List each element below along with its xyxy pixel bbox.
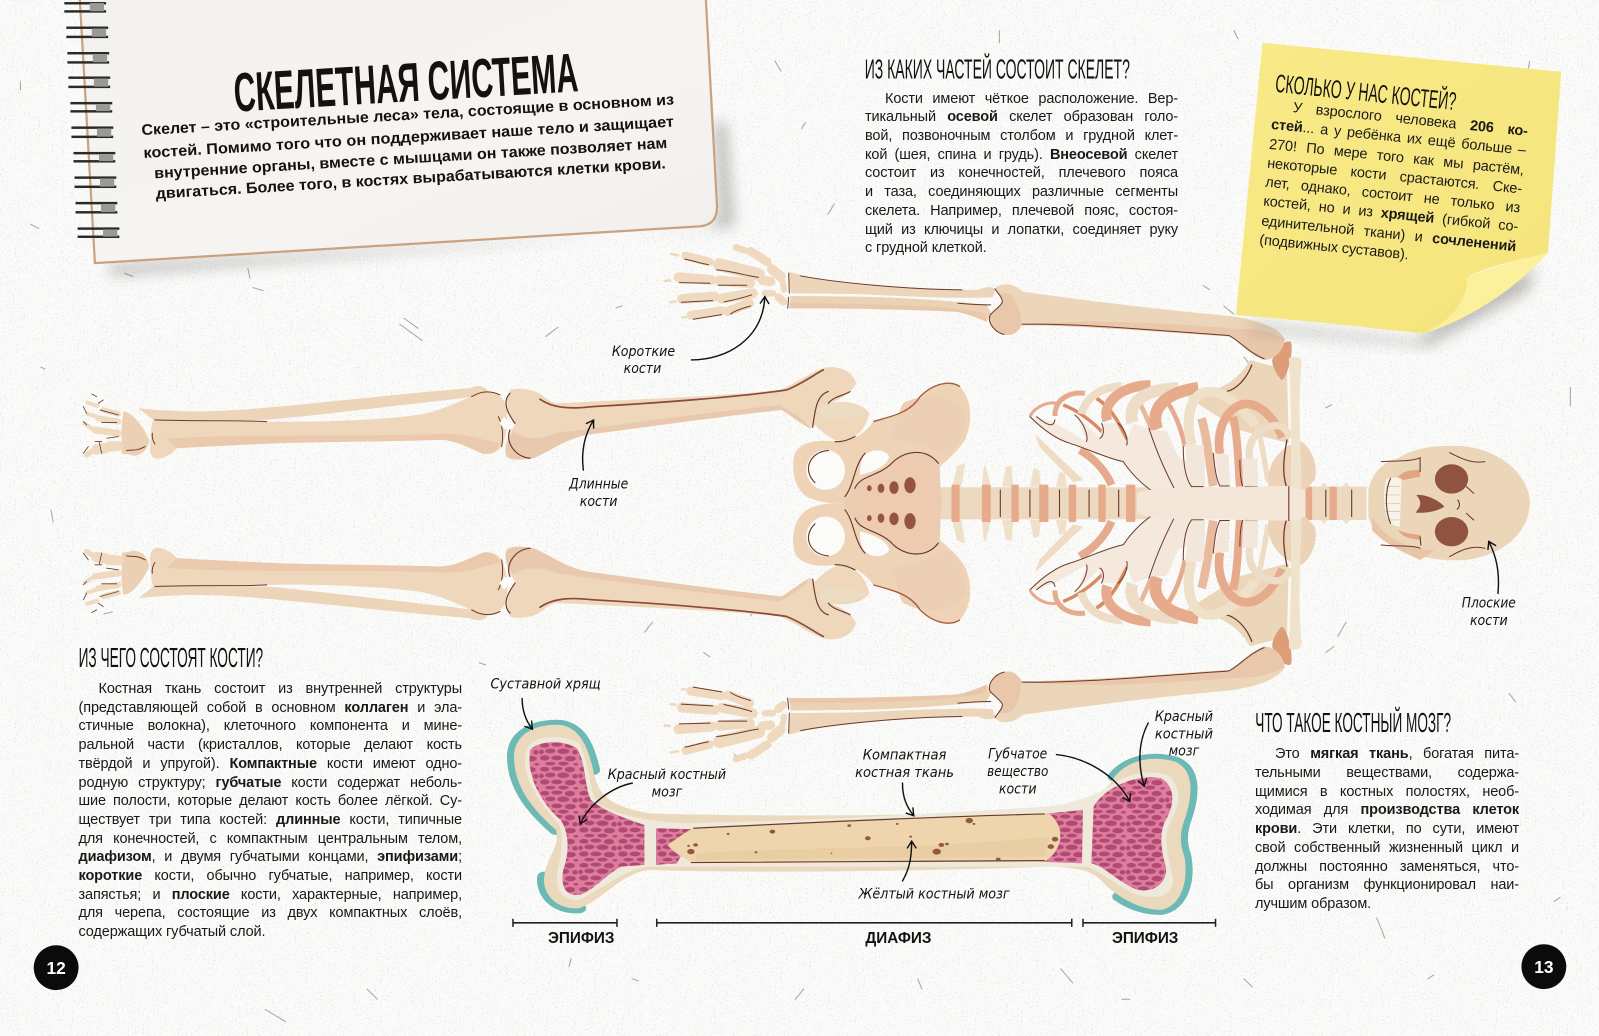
text block: what bones are made of: для конечностей, с компактным центральным телом,	[78, 831, 462, 847]
text block: what bones are made of: запястья; и плоские кости, характерные, например,	[78, 887, 462, 903]
title: СКЕЛЕТНАЯ СИСТЕМА	[232, 41, 580, 124]
heading: parts of skeleton: ИЗ КАКИХ ЧАСТЕЙ СОСТОИТ СКЕЛЕТ?	[865, 54, 1130, 85]
intro text: костей. Помимо того что он поддерживает наше тело и защищает	[143, 113, 675, 162]
intro text: Скелет – это «строительные леса» тела, состоящие в основном из	[141, 91, 675, 139]
spine	[932, 463, 1366, 543]
text block: bone marrow: щимися в костных полостях, необ-	[1255, 784, 1519, 800]
text block: what bones are made of	[78, 681, 462, 940]
label: short bones: Короткие	[612, 344, 675, 360]
sticky heading: СКОЛЬКО У НАС КОСТЕЙ?	[1274, 68, 1458, 116]
text block: parts of skeleton: и таза, соединяющих различные сегменты	[865, 184, 1178, 200]
text block: what bones are made of: ральной части (кристаллов, которые делают кость	[78, 737, 462, 753]
page number 12	[34, 945, 79, 990]
arrow: yellow marrow	[902, 841, 912, 881]
skull	[1368, 446, 1530, 560]
upper leg (top)	[83, 367, 869, 460]
label: compact tissue	[855, 748, 954, 781]
label: flat bones: кости	[1470, 613, 1508, 629]
arrow: short bones	[691, 297, 765, 360]
text block: bone marrow: Это мягкая ткань, богатая пита-	[1275, 746, 1519, 762]
bracket: epiphysis left: ЭПИФИЗ	[548, 930, 615, 947]
red bone marrow	[529, 742, 1172, 895]
label: spongy bone	[987, 747, 1049, 797]
page number 13: 13	[1534, 957, 1554, 977]
bone diagram	[514, 725, 1191, 910]
text block: bone marrow: свой собственный жизненный цикл и	[1255, 840, 1519, 856]
page number 12: 12	[47, 958, 66, 978]
panel: notebook page	[64, 0, 717, 263]
arrow: compact tissue	[902, 783, 914, 816]
intro text: двигаться. Более того, в костях вырабатываются клетки крови.	[155, 155, 666, 203]
text block: what bones are made of: шие полости, которые делают кость более лёгкой. Су-	[78, 793, 462, 809]
text block: parts of skeleton: с грудной клеткой.	[865, 240, 987, 256]
text block: parts of skeleton: тикальный осевой скелет образован голо-	[865, 109, 1178, 125]
shadow: sticky note	[1246, 267, 1535, 347]
label: flat bones	[1462, 596, 1516, 629]
label: spongy bone: кости	[999, 781, 1037, 797]
text block: parts of skeleton: Кости имеют чёткое расположение. Вер-	[885, 91, 1178, 107]
text block: what bones are made of: диафизом, и двумя губчатыми концами, эпифизами;	[78, 849, 462, 865]
arrow: articular cartilage	[522, 698, 532, 729]
text block: what bones are made of: ществует три типа костей: длинные кости, типичные	[78, 812, 462, 828]
shadow: notebook	[107, 122, 734, 275]
text block: sticky note: 270! По мере того как мы растём,	[1268, 136, 1524, 178]
label: long bones	[568, 476, 628, 510]
text block: what bones are made of: (представляющей собой в основном коллаген и эла-	[78, 700, 462, 716]
bracket: diaphysis: ДИАФИЗ	[865, 930, 931, 947]
text block: what bones are made of: короткие кости, обычно губчатые, например, кости	[78, 868, 462, 884]
page number 13	[1521, 944, 1566, 989]
arrow: flat bones	[1489, 541, 1499, 593]
inner pale layer	[525, 737, 1178, 900]
arrow: spongy bone	[1056, 755, 1130, 801]
text block: sticky note: лет, однако, состоит не только из	[1264, 174, 1520, 216]
label: red marrow right	[1155, 709, 1213, 760]
text block: bone marrow: лучшим образом.	[1255, 896, 1371, 912]
label: long bones: Длинные	[568, 476, 628, 492]
text block: parts of skeleton: вой, позвоночным столбом и грудной клет-	[865, 128, 1178, 144]
sternum	[1137, 486, 1305, 521]
bracket: diaphysis	[657, 919, 1072, 947]
text block: sticky note: (подвижных суставов).	[1258, 232, 1409, 263]
label: red marrow right: мозг	[1169, 744, 1200, 760]
text block: bone marrow: должны постоянно заменяться, что-	[1255, 859, 1519, 875]
text block: bone marrow: ходимая для производства клеток	[1255, 802, 1519, 818]
arrow: red marrow left	[580, 783, 632, 824]
label: red marrow left: Красный костный	[608, 767, 726, 783]
text block: sticky note: костей, но и из хрящей (гибкой со-	[1262, 193, 1518, 235]
label: red marrow right: Красный	[1155, 709, 1213, 725]
label: short bones	[612, 344, 675, 377]
skeleton illustration	[83, 247, 1530, 759]
text block: sticky note: стей... а у ребёнка их ещё больше –	[1270, 117, 1526, 158]
text block: what bones are made of: родную структуру; губчатые кости содержат неболь-	[78, 775, 462, 791]
lower arm and hand (bottom)	[665, 646, 1285, 759]
text: ИЗ ЧЕГО СОСТОЯТ КОСТИ?	[79, 642, 263, 673]
bracket: epiphysis right	[1083, 919, 1216, 947]
text block: sticky note: некоторые кости срастаются. Ске-	[1266, 155, 1522, 197]
pelvis	[793, 383, 970, 624]
spiral binding	[64, 2, 119, 238]
bone outer compact layer	[514, 725, 1191, 910]
text block: parts of skeleton: кой (шея, спина и грудь). Внеосевой скелет	[865, 147, 1178, 163]
bracket: epiphysis left	[513, 919, 617, 947]
text block: what bones are made of: содержащих губчатый слой.	[78, 924, 265, 940]
text block: bone marrow: бы организм функционировал наи-	[1255, 877, 1519, 893]
rib cage	[1030, 341, 1316, 665]
text block: bone marrow: крови. Эти клетки, по сути, имеют	[1255, 821, 1519, 837]
label: short bones: кости	[624, 361, 661, 377]
text block: sticky note	[1258, 100, 1528, 263]
label: red marrow right: костный	[1155, 726, 1213, 742]
text block: what bones are made of: Костная ткань состоит из внутренней структуры	[98, 681, 462, 697]
text block: parts of skeleton: скелета. Например, плечевой пояс, состоя-	[865, 203, 1178, 219]
text block: what bones are made of: твёрдой и упругой). Компактные кости имеют одно-	[78, 756, 462, 772]
text block: parts of skeleton	[865, 91, 1178, 256]
intro text	[141, 91, 675, 203]
articular cartilage	[514, 725, 1191, 910]
text block: what bones are made of: для черепа, состоящие из двух компактных слоёв,	[78, 905, 462, 921]
label: compact tissue: костная ткань	[855, 765, 954, 781]
text block: parts of skeleton: состоит из конечностей, плечевого пояса	[865, 165, 1178, 181]
label: flat bones: Плоские	[1462, 596, 1516, 612]
text block: sticky note: У взрослого человека 206 ко-	[1292, 100, 1528, 139]
label: compact tissue: Компактная	[863, 748, 947, 764]
upper arm and hand (top)	[665, 247, 1285, 360]
label: yellow marrow: Жёлтый костный мозг	[858, 886, 1010, 902]
label: spongy bone: Губчатое	[988, 747, 1047, 763]
text block: what bones are made of: стичные волокна), клеточного компонента и мине-	[78, 718, 462, 734]
yellow bone marrow	[668, 814, 1060, 863]
label: long bones: кости	[580, 494, 617, 510]
text block: parts of skeleton: щий из ключицы и лопатки, соединяет руку	[865, 222, 1178, 238]
panel: sticky note	[1236, 43, 1561, 333]
arrow: red marrow right	[1140, 723, 1148, 786]
text block: bone marrow: тельными веществами, содержа-	[1255, 765, 1519, 781]
label: red marrow left: мозг	[652, 784, 683, 800]
arrow: long bones	[583, 420, 594, 470]
bracket: epiphysis right: ЭПИФИЗ	[1112, 930, 1178, 947]
label: spongy bone: вещество	[987, 764, 1049, 780]
text block: bone marrow	[1255, 746, 1520, 912]
lower leg (bottom)	[83, 547, 869, 639]
label: red marrow left	[608, 767, 726, 800]
intro text: внутренние органы, вместе с мышцами он также позволяет нам	[154, 135, 668, 182]
text block: sticky note: единительной ткани) и сочленений	[1260, 213, 1516, 254]
label: articular cartilage: Суставной хрящ	[491, 676, 601, 692]
